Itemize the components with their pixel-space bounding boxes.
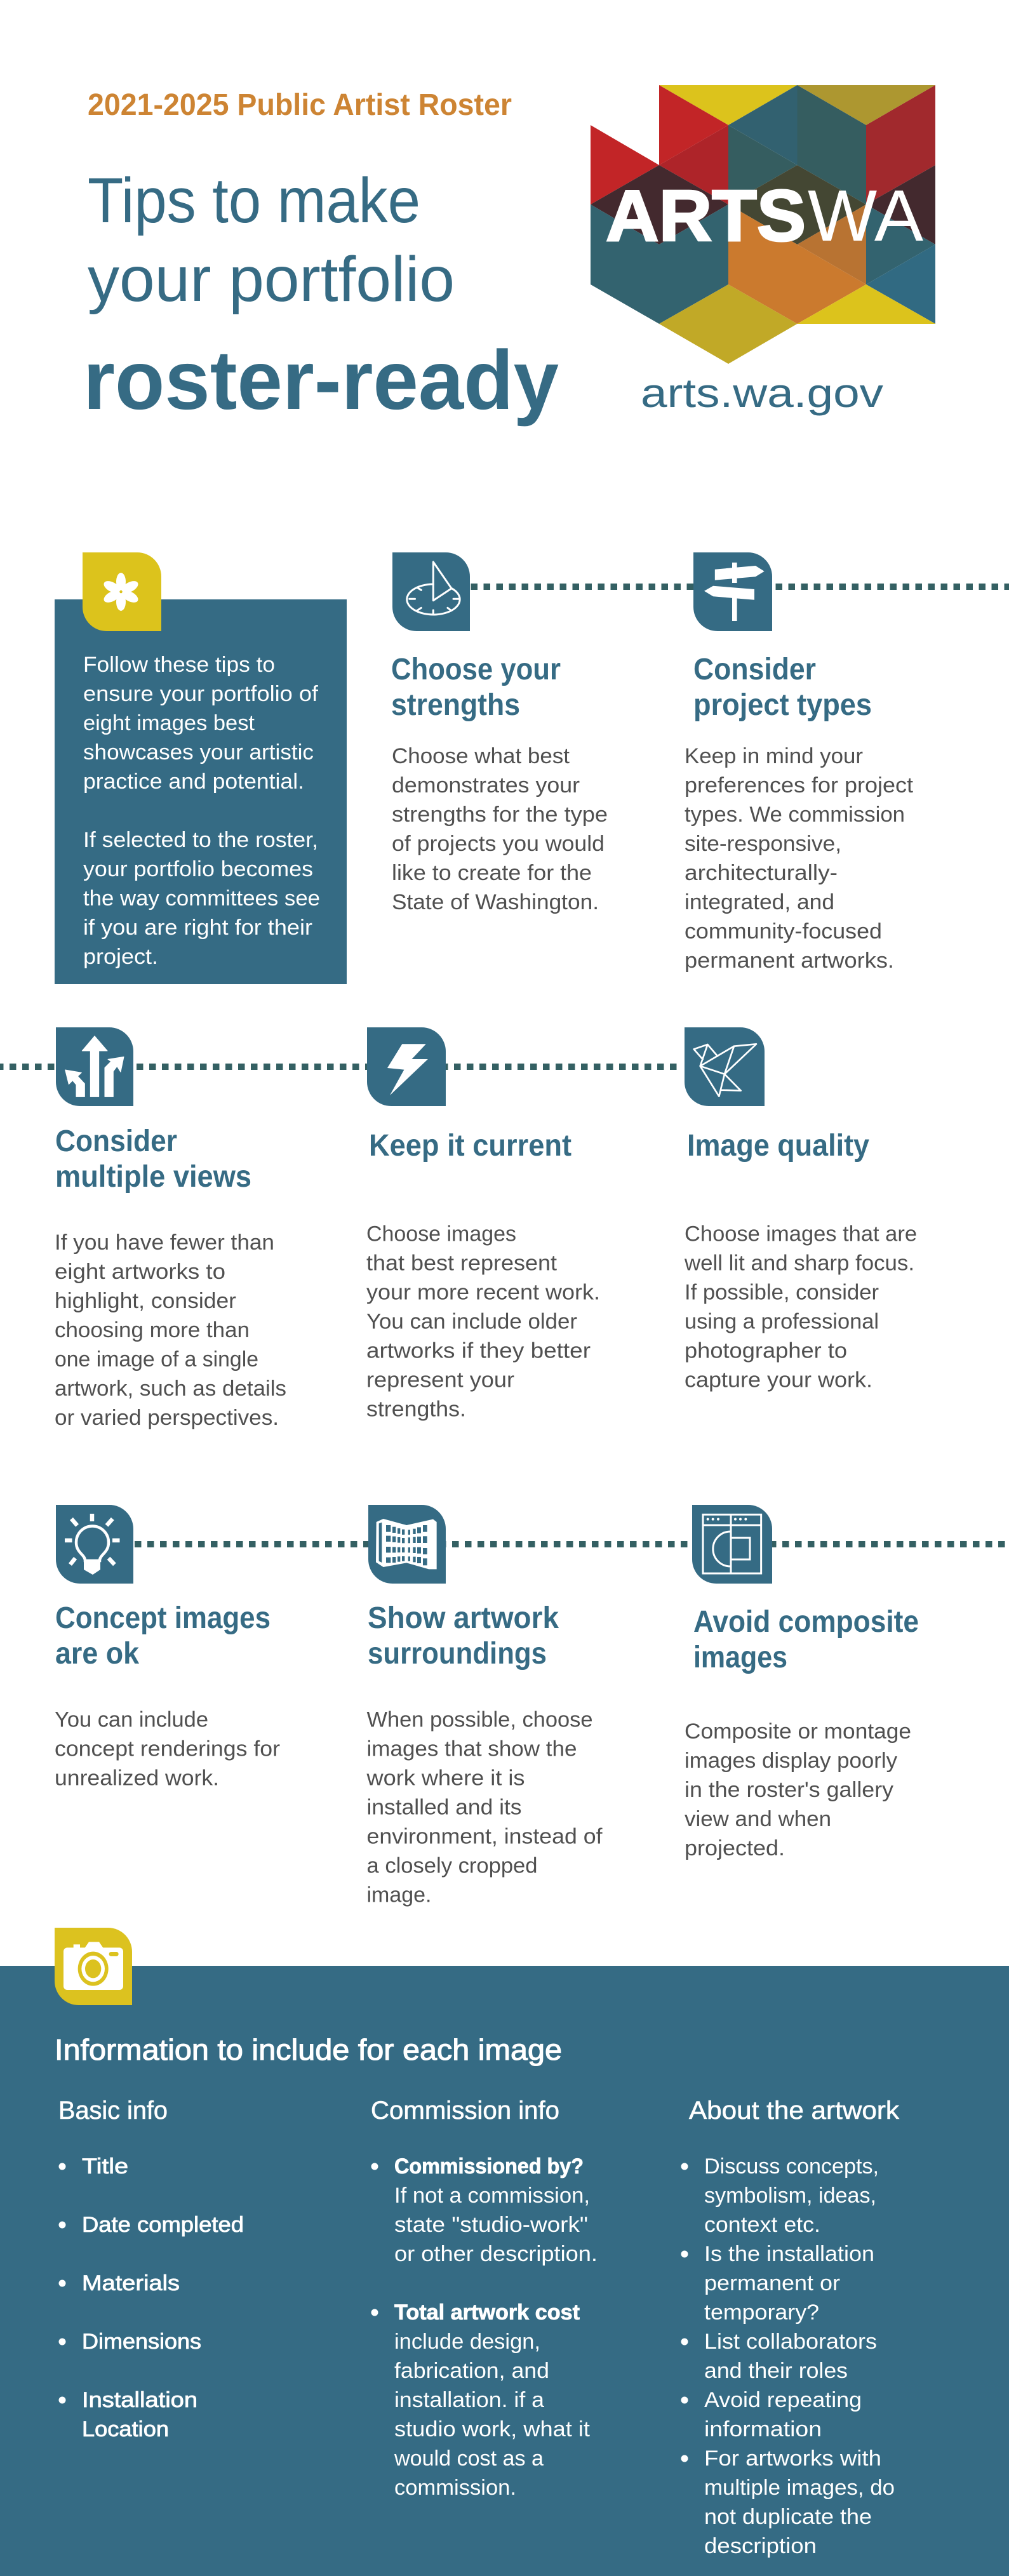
column: commission info: studio work, what it — [394, 2417, 591, 2441]
title: roster-ready — [83, 333, 559, 427]
heading: consider multiple views: multiple views — [55, 1160, 251, 1194]
text: choose your strengths: demonstrates your — [392, 773, 580, 797]
icon: building — [368, 1505, 446, 1584]
panel: intro: eight images best — [83, 711, 255, 735]
text: image quality: photographer to — [685, 1338, 847, 1363]
heading: avoid composite images: images — [693, 1641, 787, 1674]
text: concept images are ok: unrealized work. — [55, 1766, 219, 1791]
column: commission info: include design, — [394, 2330, 540, 2354]
panel: intro: practice and potential. — [83, 770, 304, 794]
column: about the artwork: Discuss concepts, — [704, 2154, 879, 2179]
column: about the artwork: permanent or — [704, 2271, 840, 2295]
column: about the artwork: Is the installation — [704, 2242, 874, 2266]
title — [83, 165, 559, 427]
panel: intro: ensure your portfolio of — [83, 682, 319, 706]
panel: information band — [0, 1928, 1009, 2576]
text: choose your strengths: like to create for the — [392, 861, 592, 885]
text: show artwork surroundings: image. — [367, 1883, 432, 1907]
column: basic info: Materials — [82, 2271, 180, 2295]
text: keep it current: represent your — [366, 1368, 514, 1392]
heading: keep it current: Keep it current — [369, 1129, 571, 1163]
heading: choose your strengths: Choose your — [391, 653, 561, 686]
icon: origami bird — [685, 1027, 765, 1106]
column: basic info: Date completed — [82, 2213, 244, 2237]
text: concept images are ok: You can include — [55, 1708, 208, 1732]
title: your portfolio — [88, 244, 455, 315]
text: show artwork surroundings: installed and its — [367, 1796, 522, 1820]
text: choose your strengths: strengths for the type — [392, 803, 608, 827]
column: basic info: Dimensions — [82, 2330, 201, 2354]
heading: concept images are ok: Concept images — [55, 1601, 271, 1635]
column: about the artwork: symbolism, ideas, — [704, 2184, 876, 2208]
text: show artwork surroundings: a closely cropped — [367, 1854, 537, 1878]
column: commission info: fabrication, and — [394, 2359, 549, 2383]
text: choose your strengths: State of Washington. — [392, 890, 599, 914]
text: consider project types: types. We commission — [685, 803, 905, 827]
text: concept images are ok: concept renderings for — [55, 1737, 280, 1761]
column: basic info: Title — [82, 2154, 128, 2179]
text: choose your strengths: of projects you would — [392, 832, 605, 856]
text: show artwork surroundings: When possible, choose — [367, 1708, 593, 1732]
text: avoid composite images: in the roster's gallery — [685, 1778, 893, 1802]
eyebrow: roster name: 2021-2025 Public Artist Roster — [88, 88, 512, 122]
text: show artwork surroundings: images that show the — [367, 1737, 577, 1761]
text: keep it current: strengths. — [366, 1397, 466, 1421]
heading: concept images are ok: are ok — [55, 1637, 139, 1671]
text: consider multiple views: artwork, such as details — [55, 1377, 286, 1401]
icon: lightning bolt — [367, 1027, 446, 1106]
text: image quality: If possible, consider — [685, 1280, 879, 1304]
text: consider project types: preferences for project — [685, 773, 914, 797]
text: consider project types: permanent artworks. — [685, 949, 894, 973]
text: consider project types: Keep in mind your — [685, 744, 863, 768]
logo: ArtsWA: WA — [808, 176, 923, 257]
icon: camera — [55, 1928, 132, 2005]
heading: avoid composite images — [693, 1605, 919, 1674]
text: consider project types — [685, 744, 914, 973]
text: keep it current: You can include older — [366, 1309, 577, 1333]
text: consider project types: community-focused — [685, 919, 882, 944]
column: about the artwork: List collaborators — [704, 2330, 877, 2354]
text: consider multiple views: highlight, consider — [55, 1289, 236, 1313]
text: consider multiple views: choosing more than — [55, 1318, 250, 1342]
text: choose your strengths: Choose what best — [392, 744, 570, 768]
column: commission info: Commission info — [371, 2097, 559, 2125]
panel: intro — [55, 599, 347, 984]
logo: ArtsWA: ARTS — [606, 176, 806, 257]
panel: intro: if you are right for their — [83, 916, 312, 940]
heading: information to include: Information to include for each image — [55, 2033, 562, 2066]
text: avoid composite images: images display poorly — [685, 1749, 897, 1773]
column: about the artwork: context etc. — [704, 2213, 820, 2237]
icon: diverging arrows — [56, 1027, 133, 1106]
text: image quality — [684, 1222, 917, 1392]
icon: composite window — [692, 1505, 772, 1584]
icon: asterisk — [83, 552, 161, 631]
column: commission info: would cost as a — [394, 2446, 544, 2471]
text: keep it current: that best represent — [366, 1251, 558, 1275]
logo: ArtsWA — [591, 85, 935, 416]
column: commission info: Total artwork cost — [394, 2300, 580, 2325]
text: avoid composite images: projected. — [685, 1836, 785, 1860]
text: consider project types: architecturally- — [685, 861, 838, 885]
column: basic info: Basic info — [58, 2097, 168, 2125]
text: show artwork surroundings — [366, 1708, 603, 1907]
column: about the artwork: not duplicate the — [704, 2505, 872, 2529]
column: basic info: Installation — [82, 2388, 197, 2412]
heading: concept images are ok — [55, 1601, 271, 1671]
column: commission info: commission. — [394, 2476, 516, 2500]
icon: light bulb — [56, 1505, 133, 1584]
column: about the artwork: and their roles — [704, 2359, 848, 2383]
text: avoid composite images — [685, 1719, 911, 1860]
text: keep it current: Choose images — [366, 1222, 516, 1246]
text: avoid composite images: view and when — [685, 1807, 831, 1831]
text: image quality: using a professional — [685, 1309, 879, 1333]
column: about the artwork: information — [704, 2417, 822, 2441]
column: commission info — [371, 2097, 598, 2500]
text: keep it current: your more recent work. — [366, 1280, 600, 1304]
dotted connector row 2 — [0, 1064, 682, 1070]
text: consider multiple views — [55, 1231, 286, 1430]
column: about the artwork: For artworks with — [704, 2446, 881, 2471]
text: show artwork surroundings: work where it is — [366, 1766, 525, 1791]
panel: intro: Follow these tips to — [83, 653, 275, 677]
column: about the artwork: multiple images, do — [704, 2476, 895, 2500]
panel: intro: showcases your artistic — [83, 740, 314, 764]
heading: show artwork surroundings: Show artwork — [368, 1601, 559, 1635]
column: commission info: installation. if a — [394, 2388, 544, 2412]
text: image quality: well lit and sharp focus. — [684, 1251, 914, 1275]
text: concept images are ok — [55, 1708, 280, 1791]
column: about the artwork: description — [704, 2534, 817, 2558]
panel: intro: project. — [83, 945, 158, 969]
heading: choose your strengths: strengths — [391, 688, 520, 722]
column: basic info — [58, 2097, 244, 2441]
column: commission info: If not a commission, — [394, 2184, 590, 2208]
icon: signpost — [693, 552, 772, 631]
heading: avoid composite images: Avoid composite — [693, 1605, 919, 1639]
column: about the artwork: Avoid repeating — [704, 2388, 862, 2412]
column: basic info: Location — [82, 2417, 169, 2441]
heading: consider project types — [693, 653, 872, 722]
text: keep it current — [366, 1222, 600, 1421]
logo: ArtsWA: arts.wa.gov — [641, 370, 883, 416]
dotted connector row 1 — [471, 584, 1009, 590]
heading: show artwork surroundings: surroundings — [368, 1637, 547, 1671]
text: keep it current: artworks if they better — [366, 1338, 591, 1363]
column: about the artwork: About the artwork — [689, 2097, 900, 2125]
column: commission info: state "studio-work" — [394, 2213, 588, 2237]
text: consider multiple views: eight artworks to — [55, 1260, 225, 1284]
text: image quality: capture your work. — [685, 1368, 872, 1392]
text: avoid composite images: Composite or montage — [685, 1719, 911, 1744]
panel: intro: your portfolio becomes — [83, 857, 313, 881]
text: image quality: Choose images that are — [685, 1222, 917, 1246]
dotted connector row 3 — [135, 1541, 1009, 1547]
panel: intro: the way committees see — [83, 886, 320, 911]
heading: consider multiple views — [55, 1124, 251, 1194]
title: Tips to make — [88, 165, 420, 236]
text: consider project types: site-responsive, — [685, 832, 841, 856]
text: consider project types: integrated, and — [685, 890, 834, 914]
column: about the artwork — [681, 2097, 900, 2558]
column: commission info: or other description. — [394, 2242, 598, 2266]
text: consider multiple views: one image of a single — [55, 1347, 258, 1371]
panel: intro: If selected to the roster, — [83, 828, 318, 852]
text: show artwork surroundings: environment, instead of — [367, 1825, 603, 1849]
heading: choose your strengths — [391, 653, 561, 722]
heading: image quality: Image quality — [687, 1129, 869, 1163]
icon: sundial — [392, 552, 470, 631]
column: commission info: Commissioned by? — [394, 2154, 584, 2179]
heading: consider project types: Consider — [693, 653, 816, 686]
text: consider multiple views: If you have fewer than — [55, 1231, 274, 1255]
heading: show artwork surroundings — [368, 1601, 559, 1671]
heading: consider project types: project types — [693, 688, 872, 722]
text: consider multiple views: or varied perspectives. — [55, 1406, 279, 1430]
text: choose your strengths — [392, 744, 608, 914]
heading: consider multiple views: Consider — [55, 1124, 177, 1158]
column: about the artwork: temporary? — [704, 2300, 819, 2325]
